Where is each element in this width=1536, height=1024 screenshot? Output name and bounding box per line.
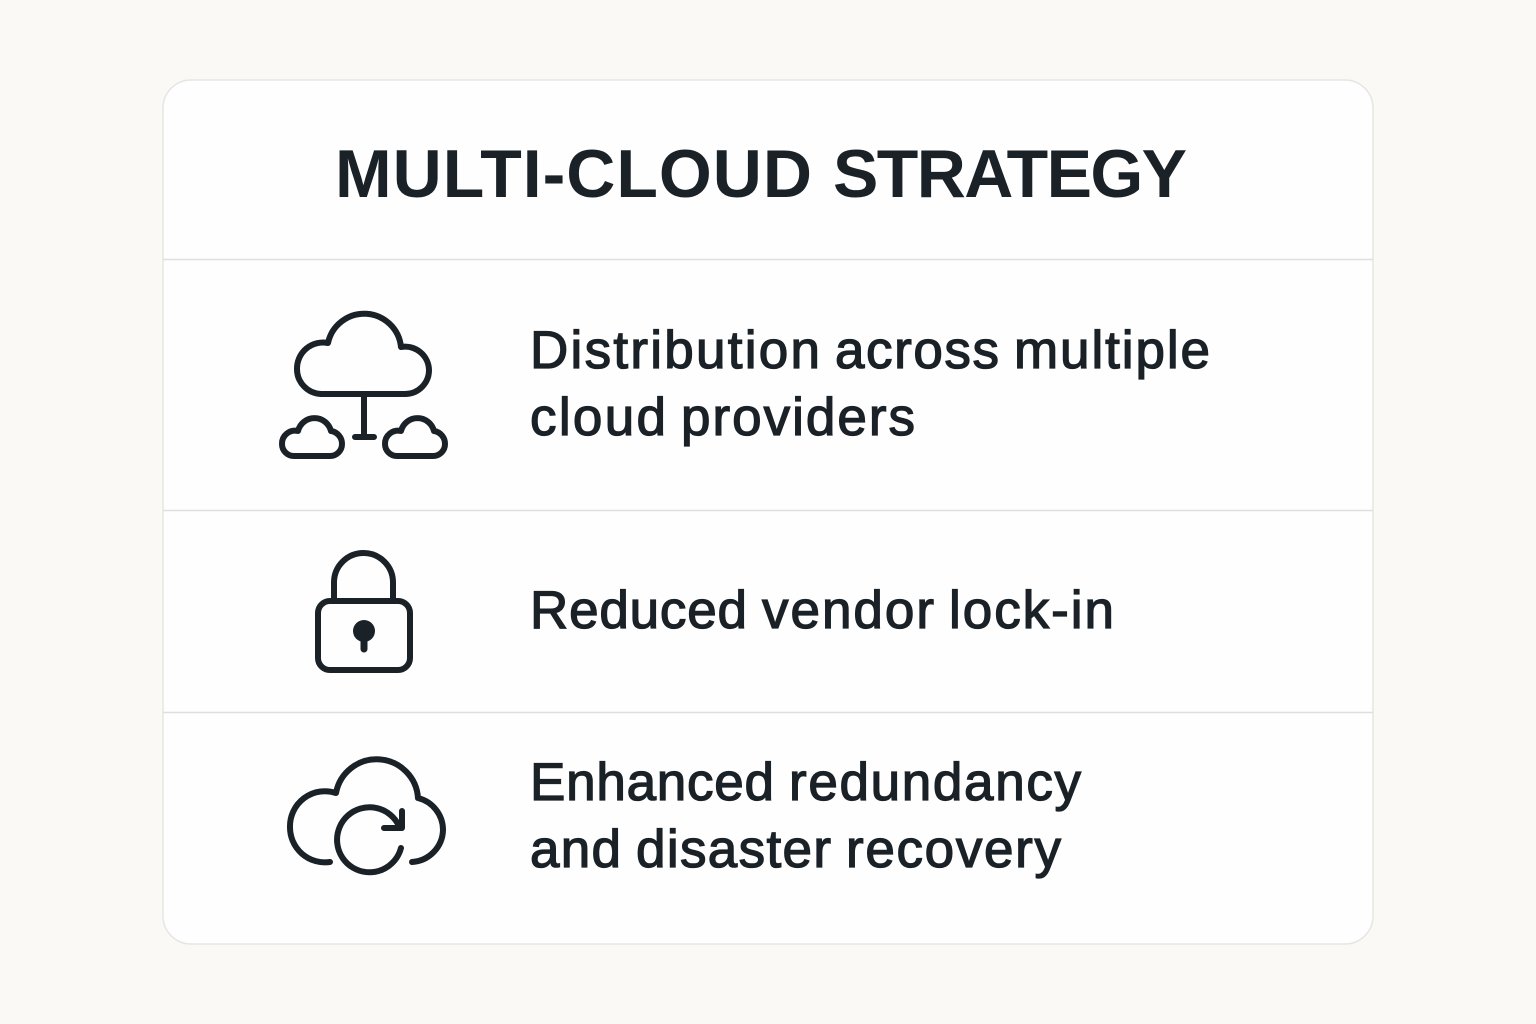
panel: main card — [163, 80, 1373, 944]
text: vendor lock-in: vendor — [762, 581, 934, 640]
icon: cloud network — [282, 314, 445, 456]
text: distribution: providers — [681, 388, 915, 447]
text: distribution: cloud — [530, 388, 666, 447]
text: redundancy: recovery — [846, 820, 1062, 879]
text: vendor lock-in: lock-in — [949, 581, 1114, 640]
text: distribution: Distribution — [530, 321, 820, 380]
text: redundancy: and — [530, 820, 621, 879]
title: MULTI-CLOUD — [335, 136, 812, 212]
text: redundancy: redundancy — [789, 753, 1082, 812]
icon: padlock — [318, 553, 410, 670]
text: vendor lock-in: Reduced — [530, 581, 747, 640]
title: STRATEGY — [833, 136, 1187, 212]
text: redundancy: Enhanced — [530, 753, 774, 812]
text: redundancy: disaster — [636, 820, 831, 879]
text: distribution: across — [835, 321, 999, 380]
text: distribution: multiple — [1014, 321, 1210, 380]
icon: cloud recovery — [290, 759, 443, 872]
